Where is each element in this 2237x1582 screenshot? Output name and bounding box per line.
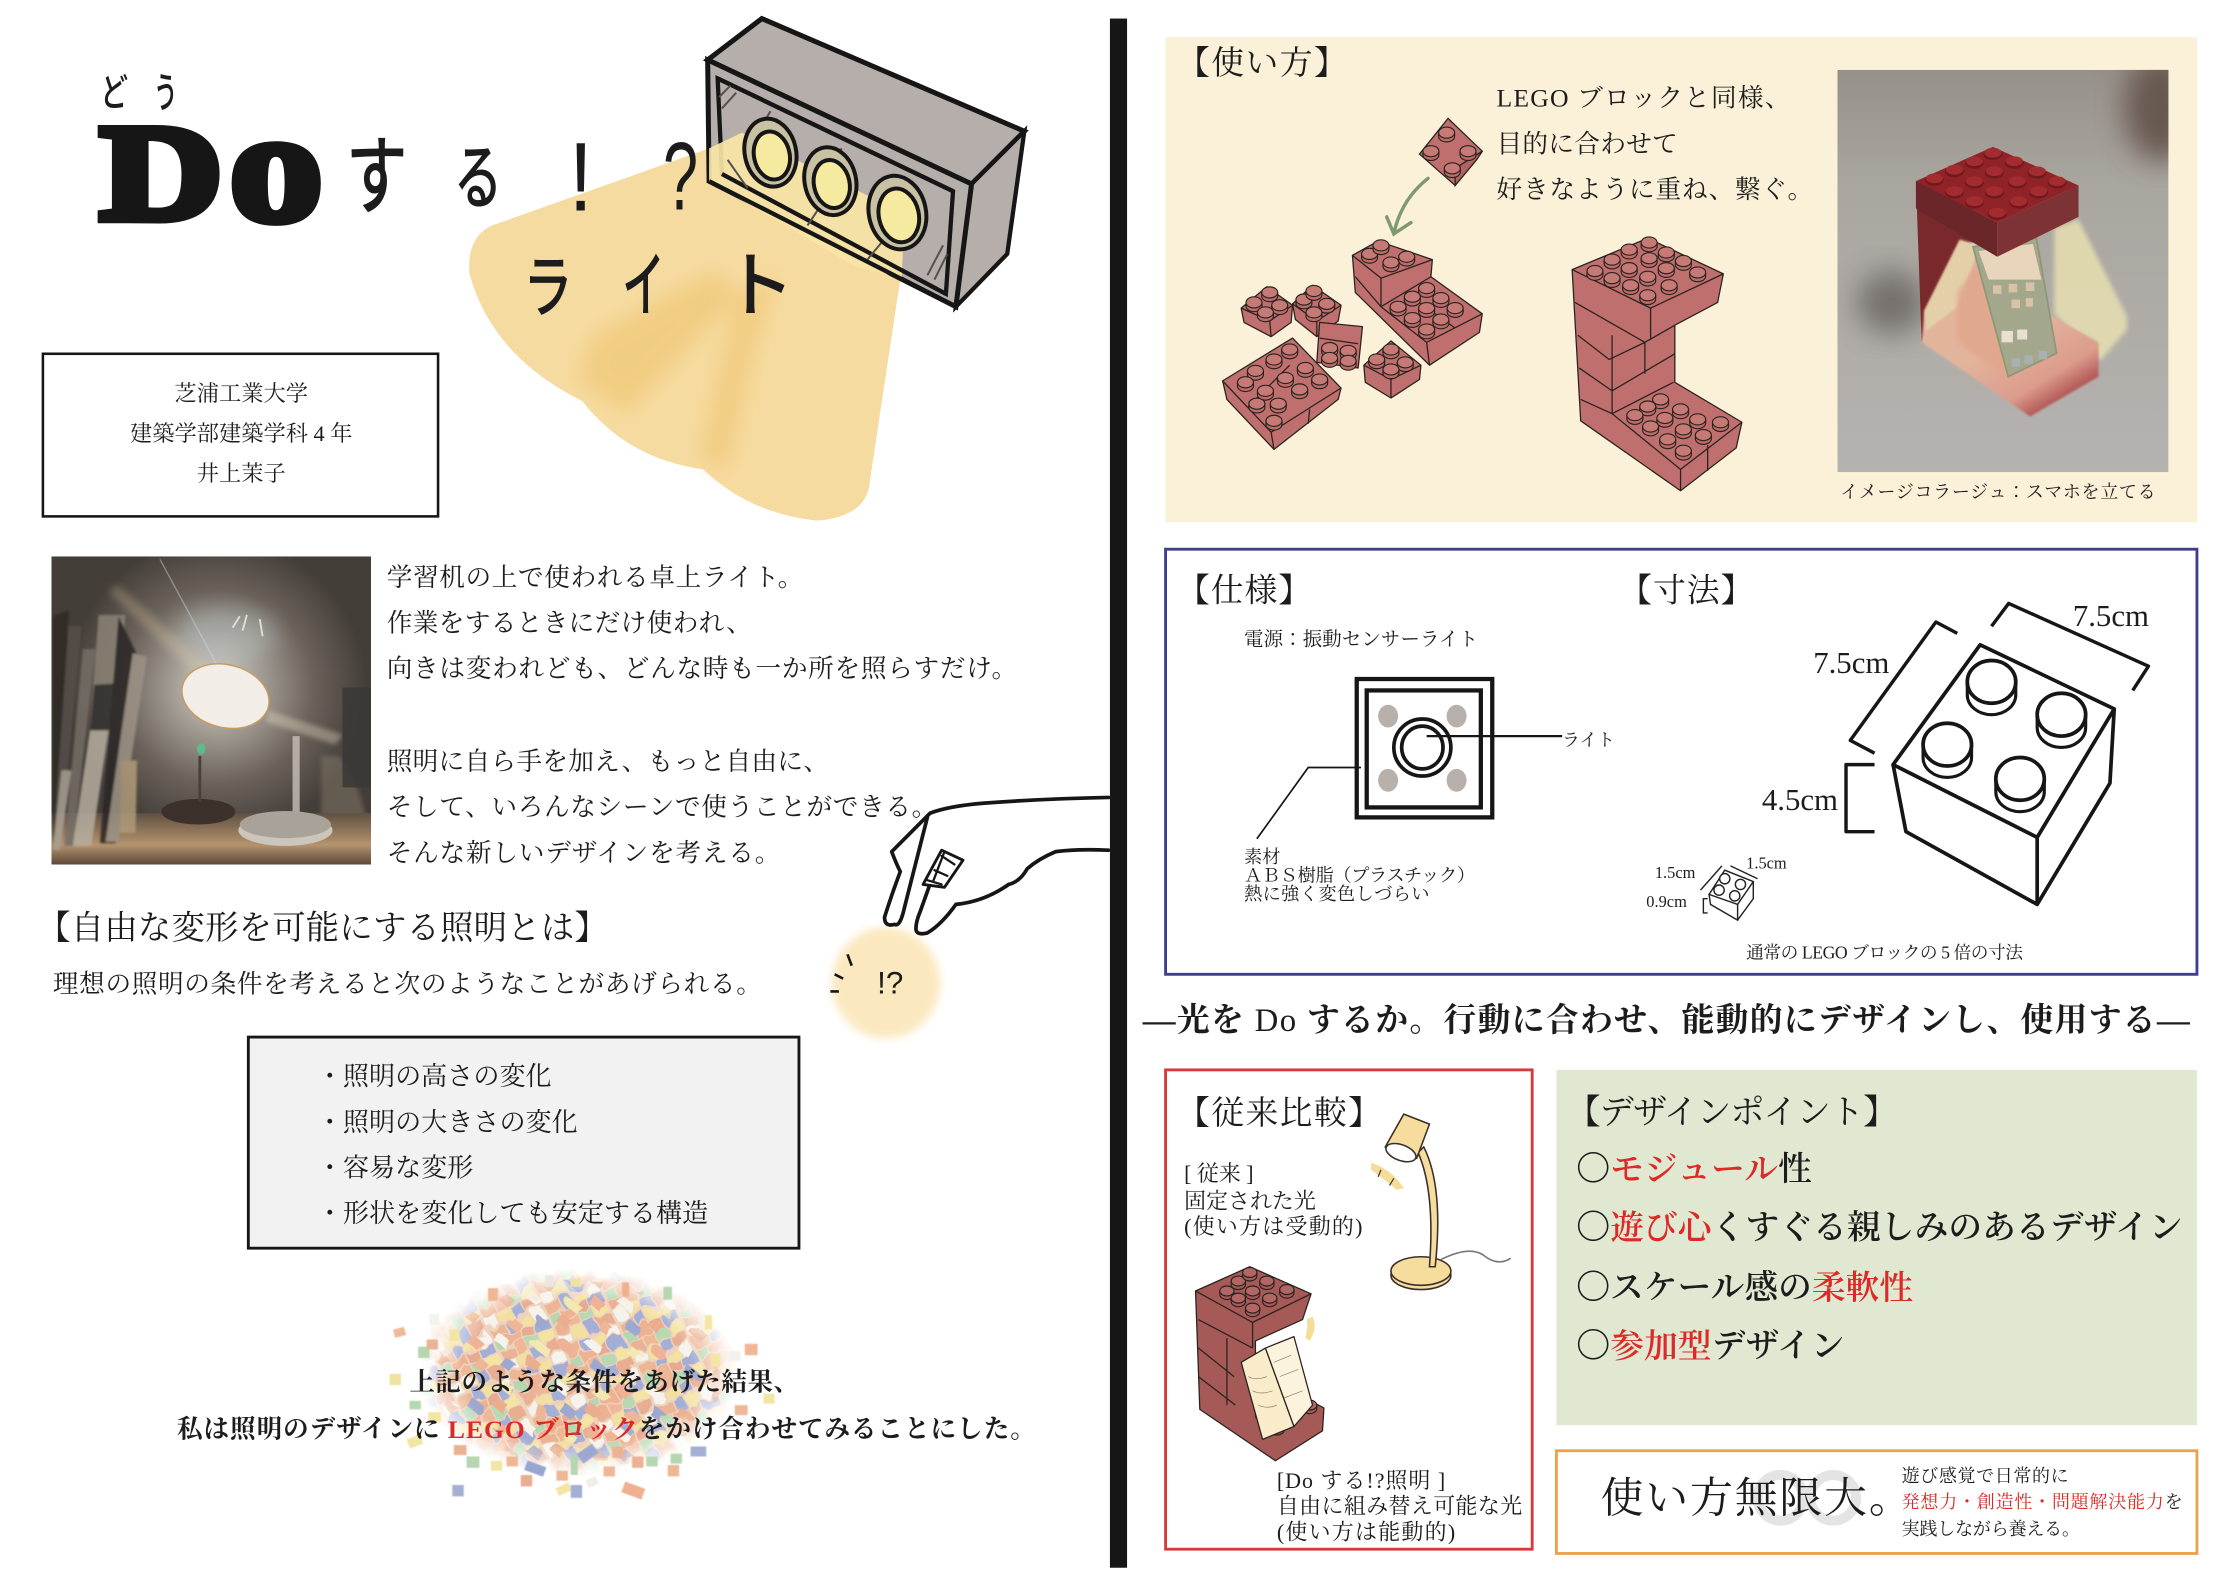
material text: ＡＢＳ樹脂（プラスチック） <box>1244 866 1475 886</box>
title furigana: ど <box>100 73 128 115</box>
design point items: 〇参加型デザイン <box>1576 1327 1845 1365</box>
how-to text: 目的に合わせて <box>1497 129 1678 158</box>
title Do: D <box>100 98 223 249</box>
icon: desk lamp <box>1371 1114 1511 1290</box>
title <box>100 71 795 327</box>
endless description: 遊び感覚で日常的に <box>1902 1466 2069 1486</box>
title light: ラ <box>523 250 573 327</box>
author box: 井上茉子 <box>197 461 286 486</box>
heading: how to use: 【使い方】 <box>1177 45 1347 82</box>
conventional text: [ 従来 ] <box>1184 1161 1254 1186</box>
glow spark: !? <box>877 965 903 1000</box>
Do light text <box>1277 1468 1522 1544</box>
Do light text: (使い方は能動的) <box>1277 1519 1455 1544</box>
brick <box>1293 285 1341 337</box>
panel: conditions list: ・照明の高さの変化 <box>317 1062 552 1091</box>
photo: desk lamp on shelf <box>51 556 371 864</box>
intro text: 学習机の上で使われる卓上ライト。 <box>387 563 803 592</box>
conclusion text: 上記のような条件をあげた結果、 <box>410 1368 799 1397</box>
how-to text <box>1497 84 1813 204</box>
conventional text: 固定された光 <box>1184 1188 1316 1213</box>
author box: 芝浦工業大学 <box>174 381 308 406</box>
conventional text: (使い方は受動的) <box>1184 1214 1362 1239</box>
title light: ト <box>723 247 795 327</box>
diagram: small brick dimensions: 1.5cm <box>1655 863 1696 882</box>
design point items: 〇遊び心くすぐる親しみのあるデザイン <box>1576 1208 2183 1246</box>
infinity mark <box>1758 1475 1856 1521</box>
stacked bricks <box>1352 240 1482 365</box>
slogan: ―光を Do するか。行動に合わせ、能動的にデザインし、使用する― <box>1142 1002 2191 1039</box>
intro text: 向きは変われども、どんな時も一か所を照らすだけ。 <box>387 654 1017 683</box>
title Do <box>100 78 323 255</box>
icon: lego brick lamp <box>708 19 1024 307</box>
dimension labels <box>1762 599 2149 817</box>
panel: conditions list: ・照明の大きさの変化 <box>317 1108 578 1137</box>
panel: endless uses <box>1556 1451 2197 1553</box>
diagram: small brick dimensions: 0.9cm <box>1646 892 1687 911</box>
title Do: o <box>229 78 323 255</box>
cap brick <box>1916 181 1997 257</box>
icon: scattered bricks <box>1223 240 1482 449</box>
panel: conditions list <box>248 1037 799 1248</box>
base <box>1922 240 2099 417</box>
author box <box>43 354 438 516</box>
title suru <box>346 122 698 232</box>
Do light text: 自由に組み替え可能な光 <box>1277 1494 1522 1519</box>
conventional text <box>1184 1161 1362 1239</box>
design point items <box>1576 1150 2183 1365</box>
scattered bricks <box>390 1275 775 1500</box>
icon: hand pinching brick <box>885 797 1109 934</box>
intro text: 作業をするときにだけ使われ、 <box>387 609 752 638</box>
diagram: large brick dimensions <box>1846 603 2148 904</box>
phone <box>1973 238 2057 377</box>
material text: 素材 <box>1244 847 1281 867</box>
photo caption: イメージコラージュ：スマホを立てる <box>1840 482 2156 502</box>
conclusion text: 私は照明のデザインに LEGO ブロックをかけ合わせてみることにした。 <box>177 1415 1036 1444</box>
center divider <box>1110 19 1127 1568</box>
panel: design points <box>1556 1070 2197 1425</box>
endless description <box>1902 1466 2183 1539</box>
photo: collage phone stand <box>1838 70 2168 472</box>
title suru: ! <box>569 122 593 232</box>
icon: stacked light assembly <box>1572 237 1742 491</box>
dimension labels: 7.5cm <box>2073 599 2149 633</box>
panel: how to use <box>1166 37 2198 522</box>
material text: 熱に強く変色しづらい <box>1244 884 1429 904</box>
arrow <box>1387 178 1428 234</box>
dimension labels: 7.5cm <box>1813 646 1889 680</box>
lego pile image <box>390 1270 775 1500</box>
author box: 建築学部建築学科 4 年 <box>130 421 352 446</box>
panel: specs and dimensions <box>1166 549 2197 974</box>
title suru: す <box>346 129 408 225</box>
title suru: ? <box>663 123 698 231</box>
diagram: top view <box>1257 679 1562 839</box>
light beam <box>469 148 905 521</box>
endless description: 発想力・創造性・問題解決能力を <box>1902 1491 2183 1512</box>
title suru: る <box>454 139 502 218</box>
heading: design points: 【デザインポイント】 <box>1566 1093 1897 1131</box>
panel: conditions list: ・形状を変化しても安定する構造 <box>317 1199 708 1228</box>
conclusion text <box>177 1368 1036 1444</box>
material text <box>1244 847 1475 904</box>
brick <box>1241 287 1293 337</box>
glow spark <box>830 927 940 1038</box>
subheading text: 理想の照明の条件を考えると次のようなことがあげられる。 <box>53 970 762 999</box>
column <box>1916 181 1974 342</box>
Do light text: [Do する!?照明 ] <box>1277 1468 1445 1493</box>
brick <box>1317 322 1362 370</box>
title furigana <box>100 71 178 117</box>
title furigana: う <box>154 71 178 117</box>
intro text: 照明に自ら手を加え、もっと自由に、 <box>387 747 829 776</box>
endless description: 実践しながら養える。 <box>1902 1519 2080 1539</box>
power text: 電源：振動センサーライト <box>1244 629 1478 651</box>
diagram: small brick dimensions: 1.5cm <box>1746 853 1787 872</box>
diagram: small brick dimensions <box>1646 853 1787 920</box>
how-to text: LEGO ブロックと同様、 <box>1497 84 1790 113</box>
design point items: 〇スケール感の柔軟性 <box>1576 1268 1913 1306</box>
heading: comparison: 【従来比較】 <box>1177 1095 1381 1132</box>
endless text: 使い方無限大。 <box>1601 1475 1912 1522</box>
beam on floor <box>2054 220 2127 361</box>
title light <box>523 247 795 327</box>
icon: brick lamp with book <box>1196 1267 1324 1461</box>
large brick <box>1223 338 1341 449</box>
panel: conditions list: ・容易な変形 <box>317 1154 473 1183</box>
panel: comparison <box>1166 1070 1532 1549</box>
heading: dimensions: 【寸法】 <box>1619 573 1753 610</box>
dimension caption: 通常の LEGO ブロックの 5 倍の寸法 <box>1746 943 2024 963</box>
icon: single brick <box>1419 118 1482 185</box>
brick <box>1364 341 1421 398</box>
books <box>53 611 147 850</box>
intro text: そんな新しいデザインを考える。 <box>387 838 780 867</box>
how-to text: 好きなように重ね、繋ぐ。 <box>1497 175 1813 204</box>
dimension labels: 4.5cm <box>1762 783 1838 817</box>
heading: specs: 【仕様】 <box>1177 573 1311 610</box>
label: light: ライト <box>1562 730 1615 750</box>
heading: free deformation: 【自由な変形を可能にする照明とは】 <box>37 910 608 947</box>
title light: イ <box>622 247 665 326</box>
intro text: そして、いろんなシーンで使うことができる。 <box>387 793 937 822</box>
design point items: 〇モジュール性 <box>1576 1150 1812 1188</box>
intro text <box>387 563 1017 867</box>
